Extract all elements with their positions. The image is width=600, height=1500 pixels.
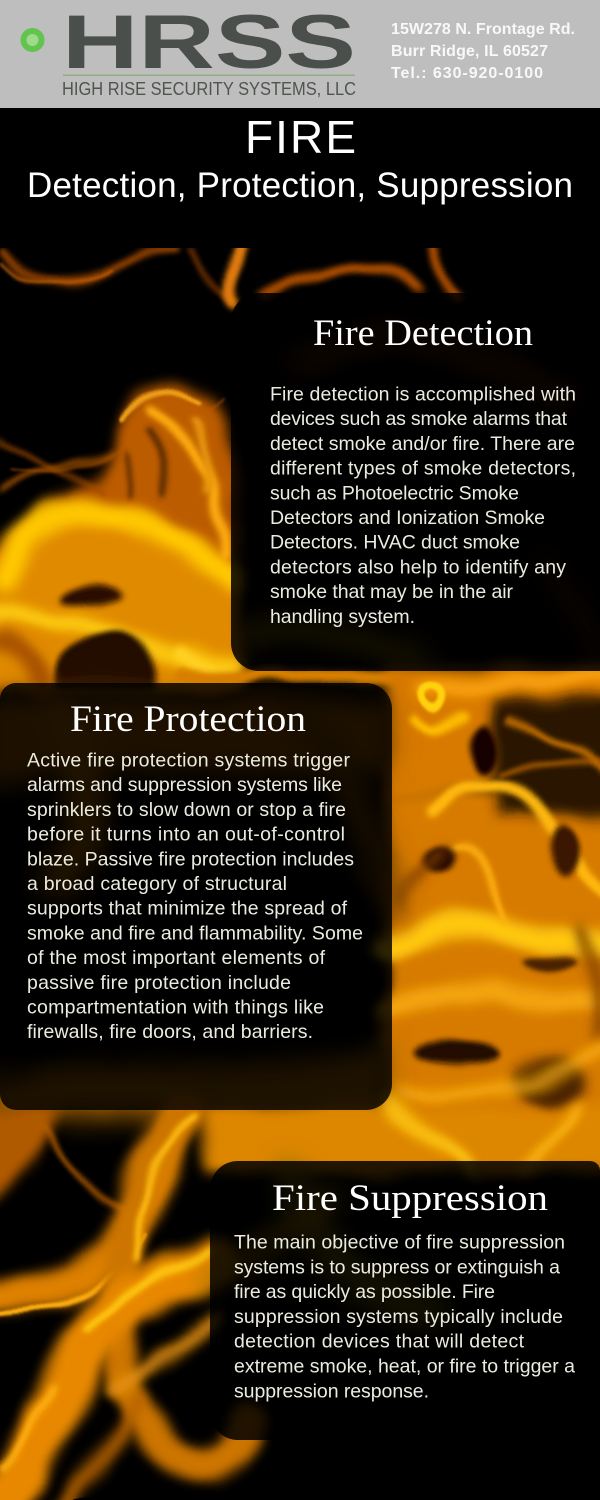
contact address: Burr Ridge, IL 60527	[391, 43, 548, 60]
body text: smoke and fire and flammability. Some	[27, 922, 363, 944]
body text: handling system.	[270, 606, 415, 628]
title block	[27, 111, 573, 205]
body text: firewalls, fire doors, and barriers.	[27, 1021, 313, 1043]
body text: Fire detection is accomplished with	[270, 384, 576, 406]
body text: Detectors and Ionization Smoke	[270, 507, 545, 529]
logo: HRSS wordmark: HRSS	[62, 0, 356, 85]
logo: HRSS wordmark: HIGH RISE SECURITY SYSTEMS, LLC	[62, 78, 356, 99]
header background	[0, 0, 600, 108]
body text: before it turns into an out-of-control	[27, 824, 345, 846]
panel: fire detection	[231, 293, 600, 671]
panel: fire suppression	[210, 1161, 600, 1440]
body text: extreme smoke, heat, or fire to trigger a	[234, 1356, 575, 1378]
body text: Detectors. HVAC duct smoke	[270, 532, 520, 554]
panel: fire protection	[0, 683, 392, 1110]
title: FIRE: FIRE	[245, 111, 356, 163]
top wisps	[0, 240, 455, 472]
body text: different types of smoke detectors,	[270, 458, 576, 480]
body text	[234, 1232, 575, 1402]
body text: alarms and suppression systems like	[27, 774, 342, 796]
body text: systems is to suppress or extinguish a	[234, 1256, 560, 1278]
bottom flame field	[0, 1105, 600, 1500]
panel background	[0, 683, 392, 1110]
body text: a broad category of structural	[27, 873, 287, 895]
heading: Fire Protection	[70, 699, 306, 740]
body text: sprinklers to slow down or stop a fire	[27, 799, 346, 821]
body text: suppression systems typically include	[234, 1306, 563, 1328]
contact address: Tel.: 630-920-0100	[391, 65, 543, 82]
body text: blaze. Passive fire protection includes	[27, 848, 354, 870]
heading: Fire Detection	[313, 313, 533, 354]
left big flame	[0, 385, 240, 690]
body text	[270, 384, 576, 628]
body text: Active fire protection systems trigger	[27, 750, 350, 772]
logo: HRSS wordmark	[62, 0, 356, 99]
heading: Fire Suppression	[272, 1178, 548, 1219]
body text	[27, 750, 363, 1043]
body text: The main objective of fire suppression	[234, 1232, 565, 1254]
body text: of the most important elements of	[27, 947, 326, 969]
flame behind protection panel	[0, 696, 392, 1120]
body text: detect smoke and/or fire. There are	[270, 433, 575, 455]
body text: detection devices that will detect	[234, 1331, 525, 1353]
body text: devices such as smoke alarms that	[270, 408, 568, 430]
body text: compartmentation with things like	[27, 996, 324, 1018]
subtitle: Detection, Protection, Suppression	[27, 166, 573, 205]
body text: such as Photoelectric Smoke	[270, 482, 519, 504]
icon: green logo dot	[20, 28, 44, 52]
body text: supports that minimize the spread of	[27, 898, 348, 920]
body text: suppression response.	[234, 1380, 429, 1402]
body text: passive fire protection include	[27, 972, 291, 994]
body text: smoke that may be in the air	[270, 581, 514, 603]
panel background	[231, 293, 600, 671]
contact address: 15W278 N. Frontage Rd.	[391, 21, 575, 38]
flame glow behind suppression panel	[210, 1180, 430, 1310]
band above protection panel	[180, 672, 392, 680]
contact address	[391, 21, 575, 82]
panel background	[210, 1161, 600, 1440]
right flame field	[385, 665, 600, 1130]
body text: detectors also help to identify any	[270, 556, 566, 578]
body text: fire as quickly as possible. Fire	[234, 1281, 495, 1303]
flame glow behind detection panel	[240, 339, 600, 660]
header bar	[0, 0, 600, 108]
